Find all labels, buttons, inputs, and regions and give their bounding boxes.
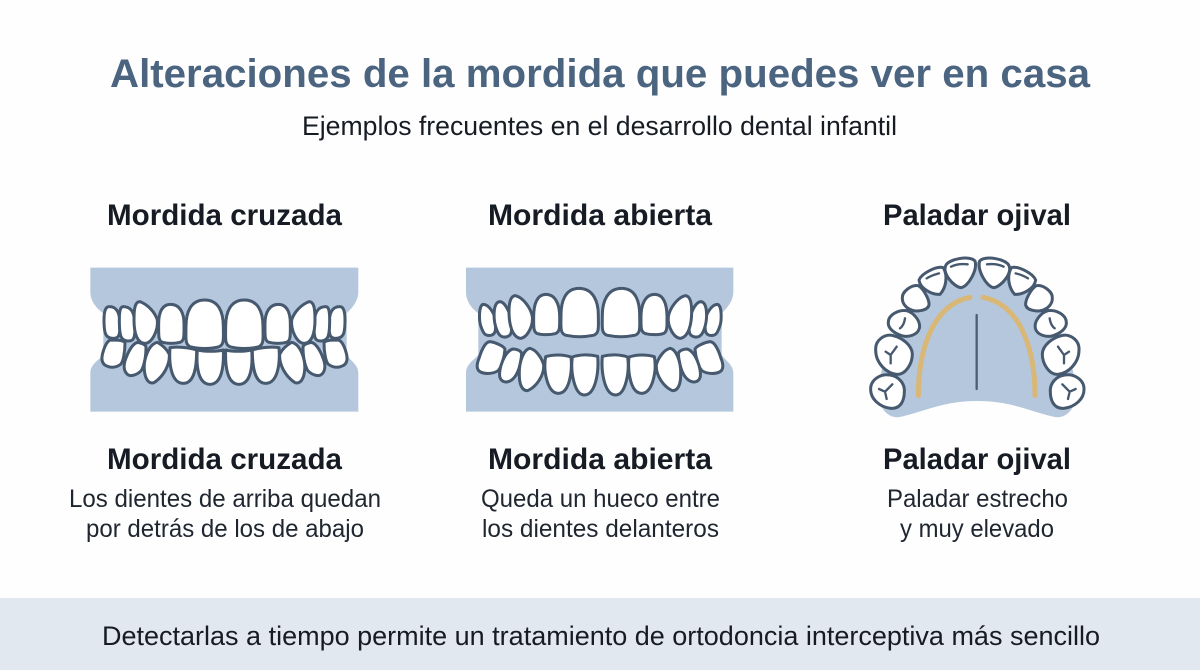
gold arch left — [918, 297, 970, 396]
lower teeth right — [602, 342, 723, 395]
illustration: crossbite teeth — [90, 268, 358, 412]
label: mordida abierta: Mordida abierta — [488, 443, 712, 476]
label: paladar ojival: Paladar ojival — [883, 443, 1071, 476]
description: paladar ojival — [887, 485, 1068, 543]
subtitle: Ejemplos frecuentes en el desarrollo dental infantil — [302, 111, 897, 141]
upper teeth left — [104, 300, 223, 348]
upper teeth right — [602, 288, 721, 338]
panel: mordida cruzada — [69, 199, 381, 543]
tooth marks right — [987, 264, 1076, 399]
gum background — [466, 268, 733, 412]
heading: mordida abierta: Mordida abierta — [488, 199, 712, 232]
gum background — [90, 268, 358, 412]
upper teeth right — [226, 300, 345, 348]
description: paladar ojival: y muy elevado — [900, 515, 1054, 543]
illustration: high arched palate — [871, 258, 1084, 417]
description: mordida abierta — [481, 485, 720, 543]
midline — [973, 315, 980, 389]
heading: mordida cruzada: Mordida cruzada — [107, 199, 342, 232]
lower teeth right — [226, 340, 347, 384]
panel: mordida abierta — [466, 199, 733, 543]
panel: paladar ojival — [871, 199, 1084, 543]
lower teeth left — [102, 340, 223, 384]
description: mordida abierta: los dientes delanteros — [482, 515, 719, 543]
footer banner — [0, 598, 1200, 670]
heading: paladar ojival: Paladar ojival — [883, 199, 1071, 232]
upper teeth left — [480, 288, 598, 338]
lower teeth left — [477, 342, 598, 395]
description: mordida cruzada — [69, 485, 381, 543]
teeth right — [979, 258, 1084, 408]
title: Alteraciones de la mordida que puedes ver en casa — [110, 52, 1091, 96]
label: mordida cruzada: Mordida cruzada — [107, 443, 342, 476]
teeth left — [871, 258, 975, 408]
footer banner: Detectarlas a tiempo permite un tratamiento de ortodoncia interceptiva más sencillo — [102, 621, 1100, 651]
illustration: open bite teeth — [466, 268, 733, 412]
description: mordida cruzada: Los dientes de arriba quedan — [69, 485, 381, 513]
gold arch right — [983, 297, 1035, 396]
description: paladar ojival: Paladar estrecho — [887, 485, 1068, 513]
description: mordida abierta: Queda un hueco entre — [481, 485, 720, 513]
palate background — [878, 262, 1076, 417]
tooth marks left — [879, 264, 968, 399]
description: mordida cruzada: por detrás de los de abajo — [86, 515, 364, 543]
